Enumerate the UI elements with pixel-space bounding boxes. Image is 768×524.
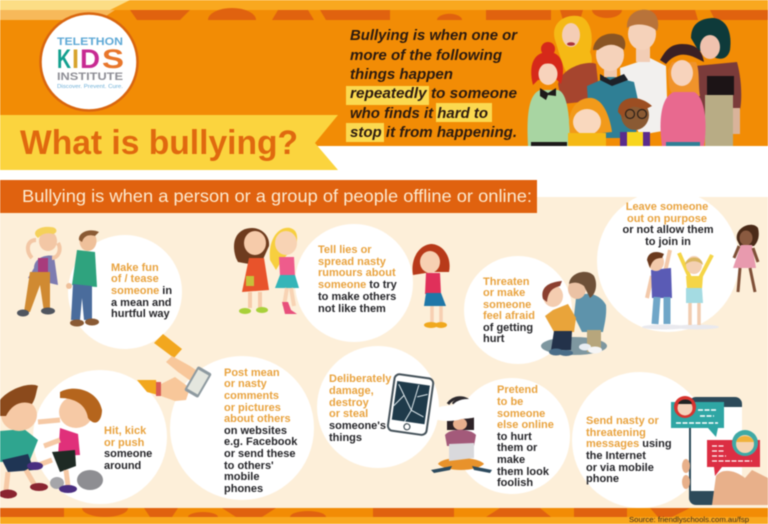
text: messages: phone [586, 473, 619, 485]
red chat bubble [707, 430, 760, 476]
text: damage: damage, [329, 385, 374, 397]
text: tell lies: to make others [318, 291, 396, 303]
title ribbon [0, 115, 338, 170]
panel: tell lies [234, 224, 450, 342]
text: messages [586, 415, 672, 485]
text: make fun: Make fun [111, 262, 159, 274]
text: messages: or via mobile [586, 462, 654, 474]
redhead girl in green sweater [528, 42, 570, 146]
text: pretend: else online [497, 419, 554, 431]
text: leave out: to join in [645, 236, 691, 248]
text: threaten: feel afraid [483, 310, 535, 322]
logo badge: Discover. Prevent. Cure. [57, 84, 123, 90]
illustration: phone with chat bubbles [671, 396, 768, 505]
panel: pretend online [430, 378, 570, 494]
text: post mean: mobile [224, 471, 259, 483]
illustration: hands and phone [137, 334, 212, 401]
text: hit [104, 425, 152, 472]
text: messages: messages using [586, 438, 672, 450]
illustration: friends cheering [642, 250, 719, 330]
text: post mean: about others [224, 413, 291, 425]
text: threaten: Threaten [483, 276, 530, 288]
illustration: excluded girl [733, 225, 759, 292]
text: threaten: someone [483, 299, 531, 311]
text: pretend: make [497, 454, 525, 466]
source credit: Source: friendlyschools.com.au/fsp [629, 515, 749, 524]
text: leave out: out on purpose [627, 213, 707, 225]
tall boy in white t-shirt [620, 10, 668, 135]
illustration: whispering girls [234, 228, 299, 314]
icon: cracked phone [387, 374, 434, 436]
text: threaten: or make [483, 287, 525, 299]
text: hit: Hit, kick [104, 425, 147, 437]
text: make fun: of / tease [111, 273, 159, 285]
definition text with highlights: stop it from happening. [350, 124, 517, 141]
panel: leave out [597, 190, 759, 332]
text: pretend: them look [497, 466, 550, 478]
blonde girl [554, 16, 600, 104]
text: damage: Deliberately [329, 373, 392, 385]
text: leave out: Leave someone [626, 201, 708, 213]
text: post mean: on websites [224, 425, 287, 437]
text: pretend: someone [497, 408, 545, 420]
text: pretend: to hurt [497, 431, 532, 443]
text: make fun: someone in [111, 285, 172, 297]
logo badge: K [57, 44, 71, 74]
panel: damage things [317, 346, 439, 468]
text: damage: destroy [329, 397, 370, 409]
text: pretend: them or [497, 442, 538, 454]
footer band [0, 508, 768, 524]
text: make fun: hurtful way [111, 308, 171, 320]
text: pretend: Pretend [497, 384, 538, 396]
text: post mean [224, 367, 298, 495]
definition text with highlights: repeatedly to someone [350, 85, 517, 102]
text: post mean: or nasty [224, 378, 268, 390]
little girl in yellow [568, 98, 612, 146]
header band [0, 0, 768, 146]
boy with glasses [618, 98, 652, 146]
illustration: excluded girl [412, 244, 450, 328]
illustration: masked girl with laptop [430, 398, 495, 473]
cream background [0, 197, 768, 508]
panel: nasty messages [572, 372, 768, 508]
text: tell lies: not like them [318, 303, 386, 315]
definition text with highlights: things happen [350, 66, 453, 83]
text: leave out [622, 201, 714, 248]
text: damage: someone's [329, 420, 386, 432]
text: pretend [497, 384, 554, 489]
logo badge [40, 14, 138, 110]
text: damage [329, 373, 392, 444]
logo badge: S [102, 44, 124, 74]
definition text with highlights: more of the following [350, 47, 502, 64]
definition text with highlights [346, 27, 518, 142]
text: post mean: or send these [224, 448, 296, 460]
hat girl in pink sweater [660, 44, 706, 146]
text: threaten: hurt [483, 333, 505, 345]
illustration: teasing pair [17, 227, 99, 326]
text: messages: Send nasty or [586, 415, 659, 427]
text: tell lies: Tell lies or [318, 244, 372, 256]
text: post mean: comments [224, 390, 279, 402]
text: damage: things [329, 432, 362, 444]
definition text with highlights: who finds it hard to [350, 105, 488, 122]
logo badge: INSTITUTE [57, 71, 123, 83]
text: leave out: or not allow them [622, 224, 714, 236]
definition text with highlights: Bullying is when one or [350, 27, 518, 44]
panel: make fun [17, 227, 182, 349]
text: threaten [483, 276, 535, 345]
panel: post mean comments [137, 334, 314, 500]
teal chat bubble [671, 396, 724, 437]
text: hit: or push [104, 437, 145, 449]
illustration: bully and boy [541, 272, 607, 356]
boy with teal sweater [587, 34, 638, 138]
illustration: fighting boys [0, 385, 103, 498]
heading bar: Bullying is when a person or a group of people offline or online: [22, 186, 532, 206]
logo badge: I [72, 44, 79, 74]
logo badge: TELETHON [57, 36, 123, 48]
text: post mean: to others' [224, 460, 274, 472]
text: post mean: or pictures [224, 402, 281, 414]
panel: hit, kick or push [0, 370, 167, 504]
text: tell lies [318, 244, 398, 315]
dark haired girl [691, 18, 741, 146]
group of young people [528, 10, 741, 146]
text: messages: threatening [586, 427, 646, 439]
text: make fun: a mean and [111, 297, 172, 309]
text: pretend: foolish [497, 477, 533, 489]
text: post mean: Post mean [224, 367, 280, 379]
text: damage: or steal [329, 408, 368, 420]
logo badge: D [80, 44, 100, 74]
text: pretend: to be [497, 396, 523, 408]
text: threaten: of getting [483, 322, 533, 334]
text: hit: someone [104, 448, 152, 460]
title: What is bullying? [20, 124, 298, 162]
text: tell lies: rumours about [318, 267, 396, 279]
panel: threaten [464, 256, 607, 364]
text: tell lies: someone to try [318, 279, 398, 291]
text: post mean: phones [224, 483, 263, 495]
text: post mean: e.g. Facebook [224, 436, 298, 448]
heading bar [0, 180, 537, 213]
text: make fun [111, 262, 172, 320]
text: hit: around [104, 460, 141, 472]
text: tell lies: spread nasty [318, 256, 387, 268]
text: messages: the Internet [586, 450, 646, 462]
